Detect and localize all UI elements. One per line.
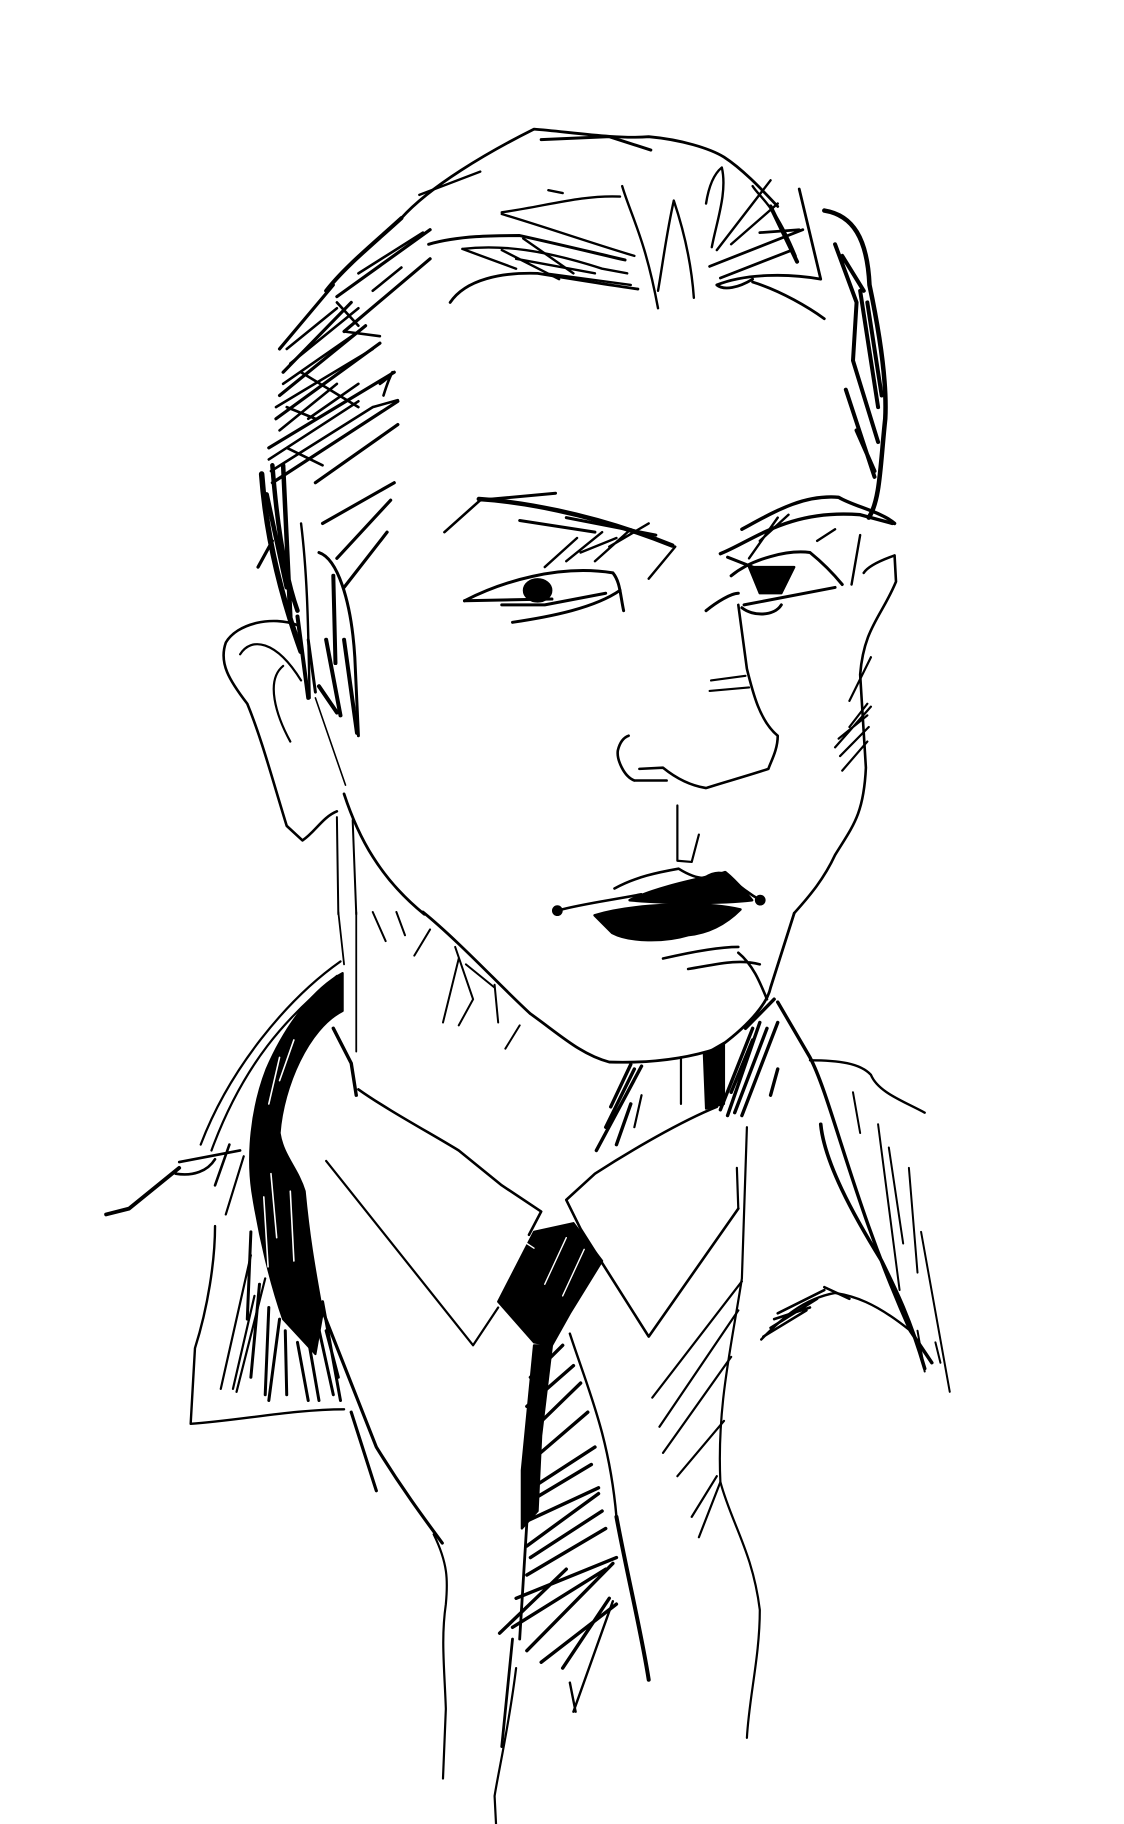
top of head outline xyxy=(401,129,778,218)
nose xyxy=(618,605,778,788)
left jaw line xyxy=(344,794,424,914)
shirt collar right flap xyxy=(566,1107,738,1337)
hair: left side hatching xyxy=(258,218,430,785)
ear xyxy=(224,621,337,840)
back collar left with dark shadow xyxy=(106,961,344,1424)
mouth xyxy=(553,869,764,940)
neck left edge xyxy=(333,912,356,1095)
shirt collar left flap xyxy=(326,1089,541,1345)
right eye and eyebrow xyxy=(706,497,895,614)
philtrum mark xyxy=(677,806,699,862)
hair: front hairline strokes xyxy=(429,168,824,319)
back collar right xyxy=(778,1002,950,1392)
body left edge xyxy=(434,1534,447,1779)
shirt front right edge and hatching xyxy=(652,1127,760,1738)
tie knot xyxy=(498,1223,602,1345)
right side of face xyxy=(794,555,896,913)
neck upper edge xyxy=(337,817,356,914)
lower tie-side body line xyxy=(495,1668,516,1824)
shirt fold mark xyxy=(761,1287,910,1339)
hair: right side xyxy=(824,211,886,518)
tie blade with hatching xyxy=(500,1334,649,1747)
left eye and eyebrow xyxy=(444,493,675,622)
neck shadow under chin xyxy=(596,999,778,1150)
shoulder line left xyxy=(319,1302,442,1543)
jaw and chin xyxy=(373,912,794,1062)
